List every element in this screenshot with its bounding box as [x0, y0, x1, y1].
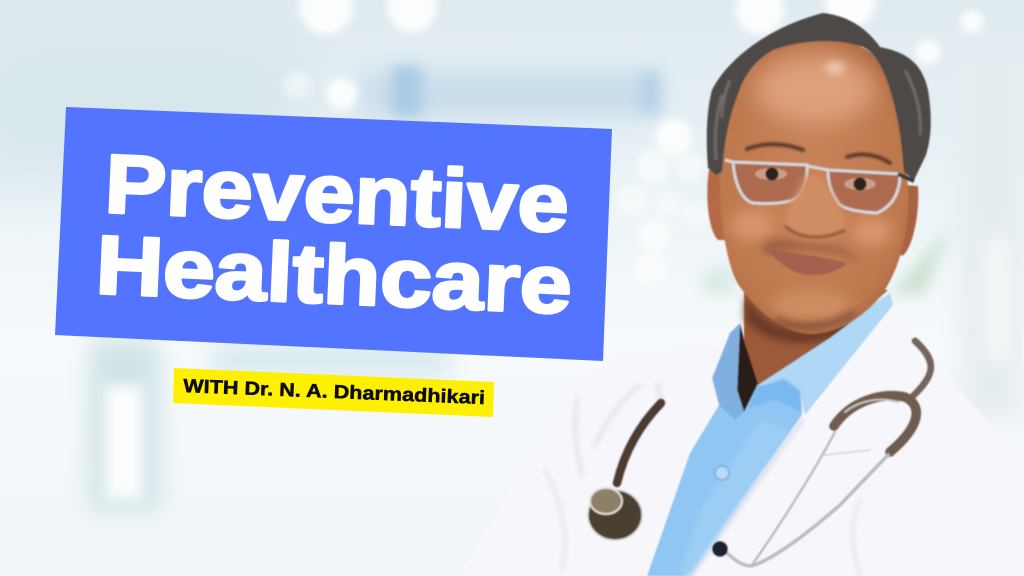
presenter label: WITH Dr. N. A. Dharmadhikari — [183, 376, 485, 409]
glasses — [725, 160, 914, 213]
neck — [744, 285, 888, 385]
neck shadow — [745, 292, 885, 343]
coat folds — [545, 384, 860, 576]
right collar — [758, 293, 893, 415]
hair — [707, 13, 931, 180]
title text: Healthcare — [94, 218, 574, 331]
eyebrows — [747, 144, 890, 163]
stethoscope chest piece — [588, 488, 642, 540]
title text: Preventive — [103, 137, 571, 250]
presenter label — [173, 368, 494, 417]
doctor portrait — [544, 12, 988, 576]
white coat — [460, 303, 1024, 576]
stethoscope tubing — [617, 341, 931, 566]
dark collar gap — [737, 323, 758, 412]
ears — [707, 170, 726, 240]
title banner — [55, 107, 612, 361]
blue shirt — [647, 385, 802, 576]
nose — [785, 175, 845, 238]
stethoscope ear tip — [712, 541, 728, 557]
left collar — [712, 323, 744, 420]
eyes — [755, 168, 787, 180]
face — [720, 40, 909, 335]
collar fold — [748, 378, 802, 412]
title text — [94, 137, 574, 331]
shirt placket shading — [678, 420, 790, 576]
shirt button — [715, 466, 729, 480]
mouth — [767, 250, 847, 275]
